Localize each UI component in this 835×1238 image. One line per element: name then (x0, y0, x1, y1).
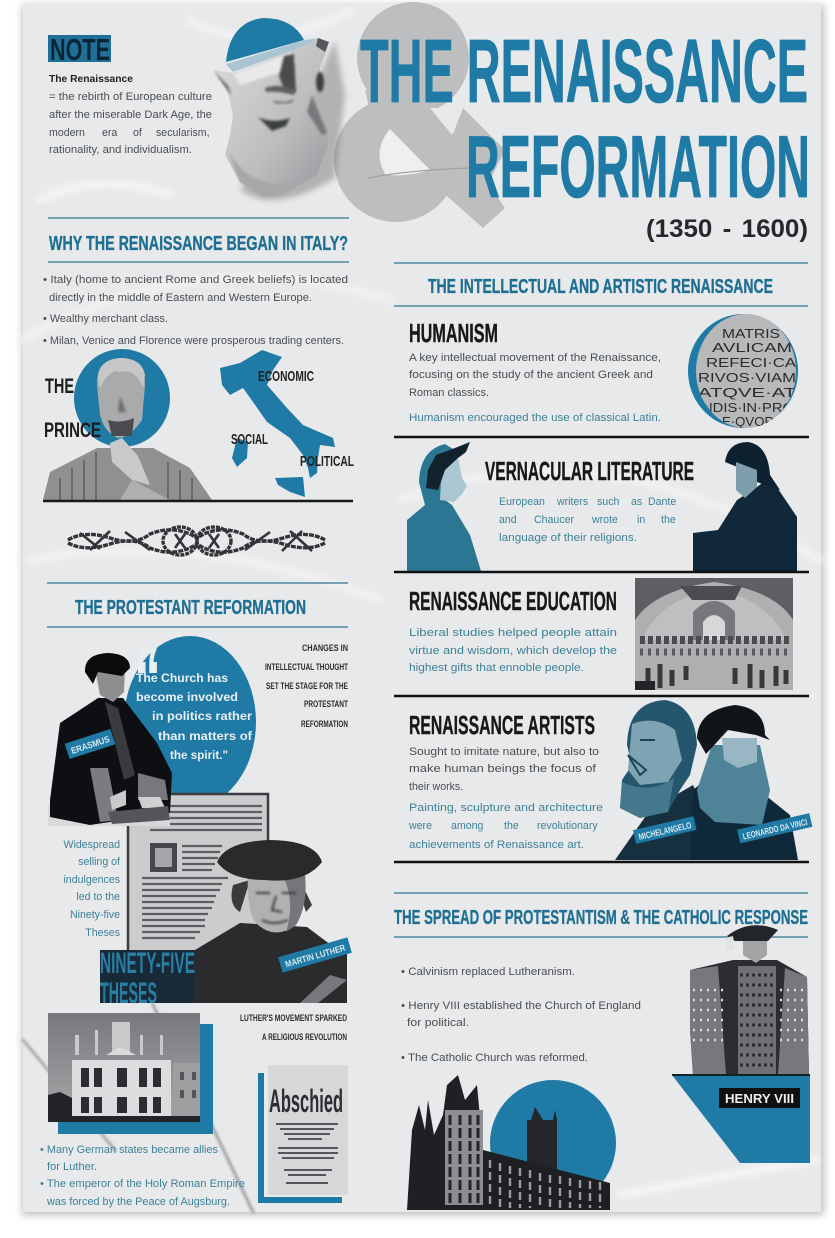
Michelangelo and Leonardo portraits: MICHELANGELO (638, 820, 692, 842)
icon: Latin inscription circle: REFECI·CA (706, 355, 796, 370)
map of Italy: SOCIAL (231, 431, 268, 448)
panel: Renaissance education: RENAISSANCE EDUCATION (409, 586, 617, 616)
icon: Latin inscription circle: RIVOS·VIAM (698, 370, 796, 385)
decorative grey ampersand (334, 2, 505, 228)
panel: Renaissance education: highest gifts that ennoble people. (409, 662, 584, 674)
quote circle: The Church has (136, 671, 228, 685)
School of Athens image (635, 578, 793, 690)
panel: vernacular literature: wrote (591, 514, 618, 526)
Michelangelo and Leonardo portraits: LEONARDO DA VINCI (742, 817, 808, 842)
note box: secularism, (156, 127, 210, 139)
section: spread of Protestantism: for political. (407, 1017, 469, 1029)
note box: modern (49, 127, 85, 139)
teal bullets: German states: for Luther. (47, 1161, 97, 1173)
section: spread of Protestantism: • The Catholic Church was reformed. (401, 1052, 588, 1064)
section: spread of Protestantism (394, 893, 808, 1064)
quote circle: “ (134, 631, 161, 727)
panel: Renaissance artists: make human beings the focus of (409, 763, 596, 775)
panel: humanism: Roman classics. (409, 387, 489, 399)
teal caption: indulgences: Theses (85, 927, 120, 939)
panel: Renaissance artists: among (451, 820, 483, 832)
old book title page: Abschied (269, 1083, 343, 1119)
small caption: changes in thought: CHANGES IN (302, 643, 348, 653)
panel: Renaissance artists: revolutionary (537, 820, 598, 832)
note box: era (102, 127, 117, 139)
map of Italy: POLITICAL (300, 453, 354, 470)
section: why the Renaissance began in Italy: • Wealthy merchant class. (43, 313, 168, 325)
small caption: changes in thought: PROTESTANT (304, 699, 348, 709)
panel: Renaissance artists: were (408, 820, 432, 832)
teal caption: indulgences (63, 839, 120, 939)
Chaucer portrait (693, 442, 797, 571)
section: why the Renaissance began in Italy: WHY THE RENAISSANCE BEGAN IN ITALY? (49, 233, 348, 255)
teal caption: indulgences: Ninety-five (70, 909, 120, 921)
note box: The Renaissance (49, 74, 133, 85)
quote circle: in politics rather (152, 709, 252, 723)
panel: Renaissance artists: achievements of Renaissance art. (409, 839, 584, 851)
panel: vernacular literature: the (661, 514, 676, 526)
note box: of (133, 127, 142, 139)
panel: Renaissance artists: RENAISSANCE ARTISTS (409, 710, 595, 740)
quote circle (124, 631, 256, 808)
panel: Renaissance education: Liberal studies helped people attain (409, 627, 617, 639)
caption: Luther's movement (240, 1013, 347, 1042)
palace photo with blue backing (48, 1013, 213, 1134)
panel: humanism: A key intellectual movement of the Renaissance, (409, 352, 661, 364)
caption: Luther's movement: A RELIGIOUS REVOLUTION (262, 1032, 347, 1042)
section: why the Renaissance began in Italy: directly in the middle of Eastern and Western Europe. (49, 292, 312, 304)
panel: humanism: focusing on the study of the ancient Greek and (409, 369, 653, 381)
note box: NOTE (50, 32, 110, 67)
icon: Latin inscription circle (688, 314, 798, 429)
Dante portrait (407, 442, 481, 571)
note box: rationality, and individualism. (49, 144, 192, 156)
panel: vernacular literature: language of their religions. (499, 532, 637, 544)
map of Italy (220, 350, 354, 497)
title: (1350 - 1600) (646, 215, 808, 243)
note box (48, 32, 212, 156)
title (360, 22, 810, 243)
panel: Renaissance education (409, 578, 793, 690)
Henry VIII portrait and label (672, 925, 810, 1163)
map of Italy: ECONOMIC (258, 368, 314, 385)
teal bullets: German states (40, 1144, 245, 1208)
teal bullets: German states: • The emperor of the Holy Roman Empire (40, 1178, 245, 1190)
panel: vernacular literature: such (597, 496, 619, 508)
panel: Renaissance artists (408, 700, 812, 860)
panel: humanism: Humanism encouraged the use of classical Latin. (409, 412, 661, 424)
Erasmus portrait: ERASMUS (70, 734, 111, 756)
panel: vernacular literature: VERNACULAR LITERATURE (485, 456, 694, 486)
panel: vernacular literature: and (499, 514, 517, 526)
icon: Latin inscription circle: MATRIS (722, 326, 780, 341)
Ninety-five theses document (128, 793, 268, 950)
panel: Renaissance artists: Painting, sculpture and architecture (409, 802, 603, 814)
section heading: Protestant Reformation: THE PROTESTANT REFORMATION (75, 597, 306, 619)
note box: after the miserable Dark Age, the (49, 109, 212, 121)
Martin Luther portrait with Ninety-five Theses banner: THESES (100, 977, 157, 1010)
teal bullets: German states: was forced by the Peace of Augsburg. (46, 1196, 230, 1208)
teal caption: indulgences: selling of (78, 856, 120, 868)
small caption: changes in thought: INTELLECTUAL THOUGHT (265, 662, 348, 672)
panel: vernacular literature: in (637, 514, 645, 526)
teal caption: indulgences: Widespread (63, 839, 120, 851)
icon: Latin inscription circle: AVLICAM (712, 340, 792, 355)
statue head with blue dome (213, 18, 345, 200)
panel: vernacular literature: writers (556, 496, 588, 508)
old book title page (258, 1065, 348, 1203)
section: why the Renaissance began in Italy: • Milan, Venice and Florence were prosperous trading centers. (43, 335, 344, 347)
caption: Luther's movement: LUTHER'S MOVEMENT SPARKED (240, 1013, 347, 1023)
quote circle: become involved (136, 690, 238, 704)
small caption: changes in thought: SET THE STAGE FOR THE (266, 681, 348, 691)
Martin Luther portrait with Ninety-five Theses banner: MARTIN LUTHER (284, 942, 347, 969)
teal caption: indulgences: led to the (76, 891, 120, 903)
section: why the Renaissance began in Italy: • Italy (home to ancient Rome and Greek beliefs) is located (43, 274, 348, 286)
cathedral with blue circle (407, 1075, 616, 1210)
panel: vernacular literature: Chaucer (534, 514, 575, 526)
panel: Renaissance artists: their works. (409, 781, 463, 793)
panel: humanism (409, 318, 661, 424)
panel: vernacular literature: as (631, 496, 642, 508)
section: why the Renaissance began in Italy (43, 218, 349, 347)
panel: vernacular literature: Dante (648, 496, 676, 508)
panel: humanism: HUMANISM (409, 318, 498, 348)
teal bullets: German states: • Many German states became allies (40, 1144, 218, 1156)
quote circle: the spirit." (170, 748, 228, 762)
icon: Latin inscription circle: NDIS·IN·PRO (702, 400, 794, 415)
Michelangelo and Leonardo portraits (615, 700, 812, 860)
panel: Renaissance artists: Sought to imitate nature, but also to (409, 746, 599, 758)
the prince statue: THE (45, 375, 74, 398)
section: spread of Protestantism: • Henry VIII established the Church of England (401, 1000, 641, 1012)
the prince statue: PRINCE (44, 419, 101, 442)
small caption: changes in thought: REFORMATION (301, 719, 348, 729)
note box: = the rebirth of European culture (49, 91, 212, 103)
panel: vernacular literature: European (499, 496, 545, 508)
icon: Latin inscription circle: ATQVE·AT (698, 385, 796, 400)
Martin Luther portrait with Ninety-five Theses banner: NINETY-FIVE (100, 947, 195, 980)
panel: Renaissance artists: the (504, 820, 519, 832)
Martin Luther portrait with Ninety-five Theses banner (100, 840, 352, 1010)
section: spread of Protestantism: • Calvinism replaced Lutheranism. (401, 966, 575, 978)
quote circle: than matters of (158, 729, 253, 743)
teal caption: indulgences: indulgences (63, 874, 120, 886)
the prince statue (43, 349, 212, 500)
panel: Renaissance education: virtue and wisdom, which develop the (409, 645, 617, 657)
ornament scroll (68, 527, 325, 555)
small caption: changes in thought (265, 643, 348, 729)
panel: vernacular literature (407, 442, 797, 571)
Erasmus portrait (48, 653, 172, 826)
Henry VIII portrait and label: HENRY VIII (725, 1091, 794, 1106)
icon: Latin inscription circle: E·QVOR (722, 414, 774, 429)
